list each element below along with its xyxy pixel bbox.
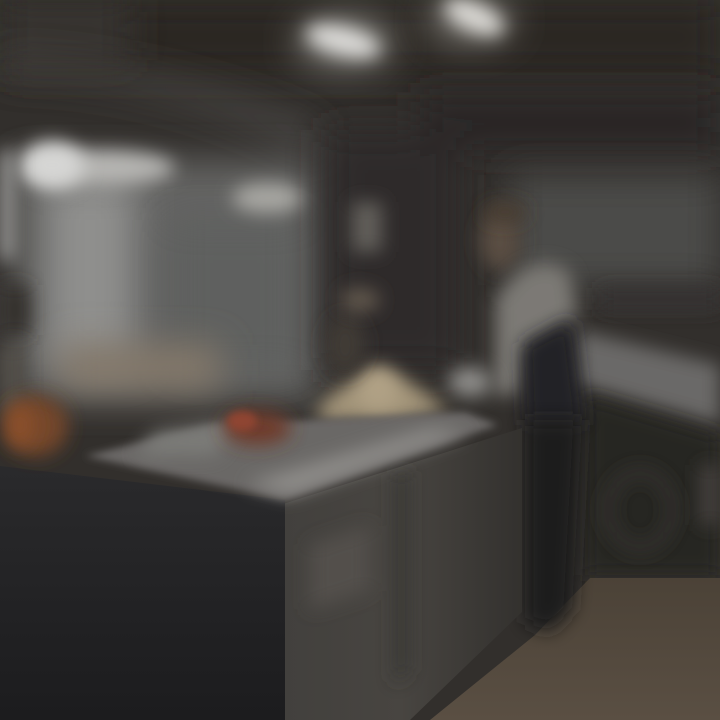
- dark central column: [325, 95, 720, 370]
- food on counter: [315, 288, 450, 422]
- island base underlay: [0, 480, 285, 720]
- ceiling lights: [295, 0, 514, 68]
- wall picture: [352, 202, 382, 252]
- red tomatoes: [223, 411, 291, 445]
- right wall panel: [510, 175, 720, 310]
- kitchen island front: [0, 466, 285, 720]
- left window area: [0, 141, 320, 415]
- kitchen island countertop: [85, 412, 498, 500]
- floor: [430, 578, 720, 720]
- right back counter: [575, 330, 720, 575]
- orange pot: [4, 396, 68, 456]
- island panel shading: [310, 470, 408, 685]
- kitchen island side: [280, 428, 522, 720]
- ceiling: [0, 0, 720, 160]
- person: [448, 202, 585, 632]
